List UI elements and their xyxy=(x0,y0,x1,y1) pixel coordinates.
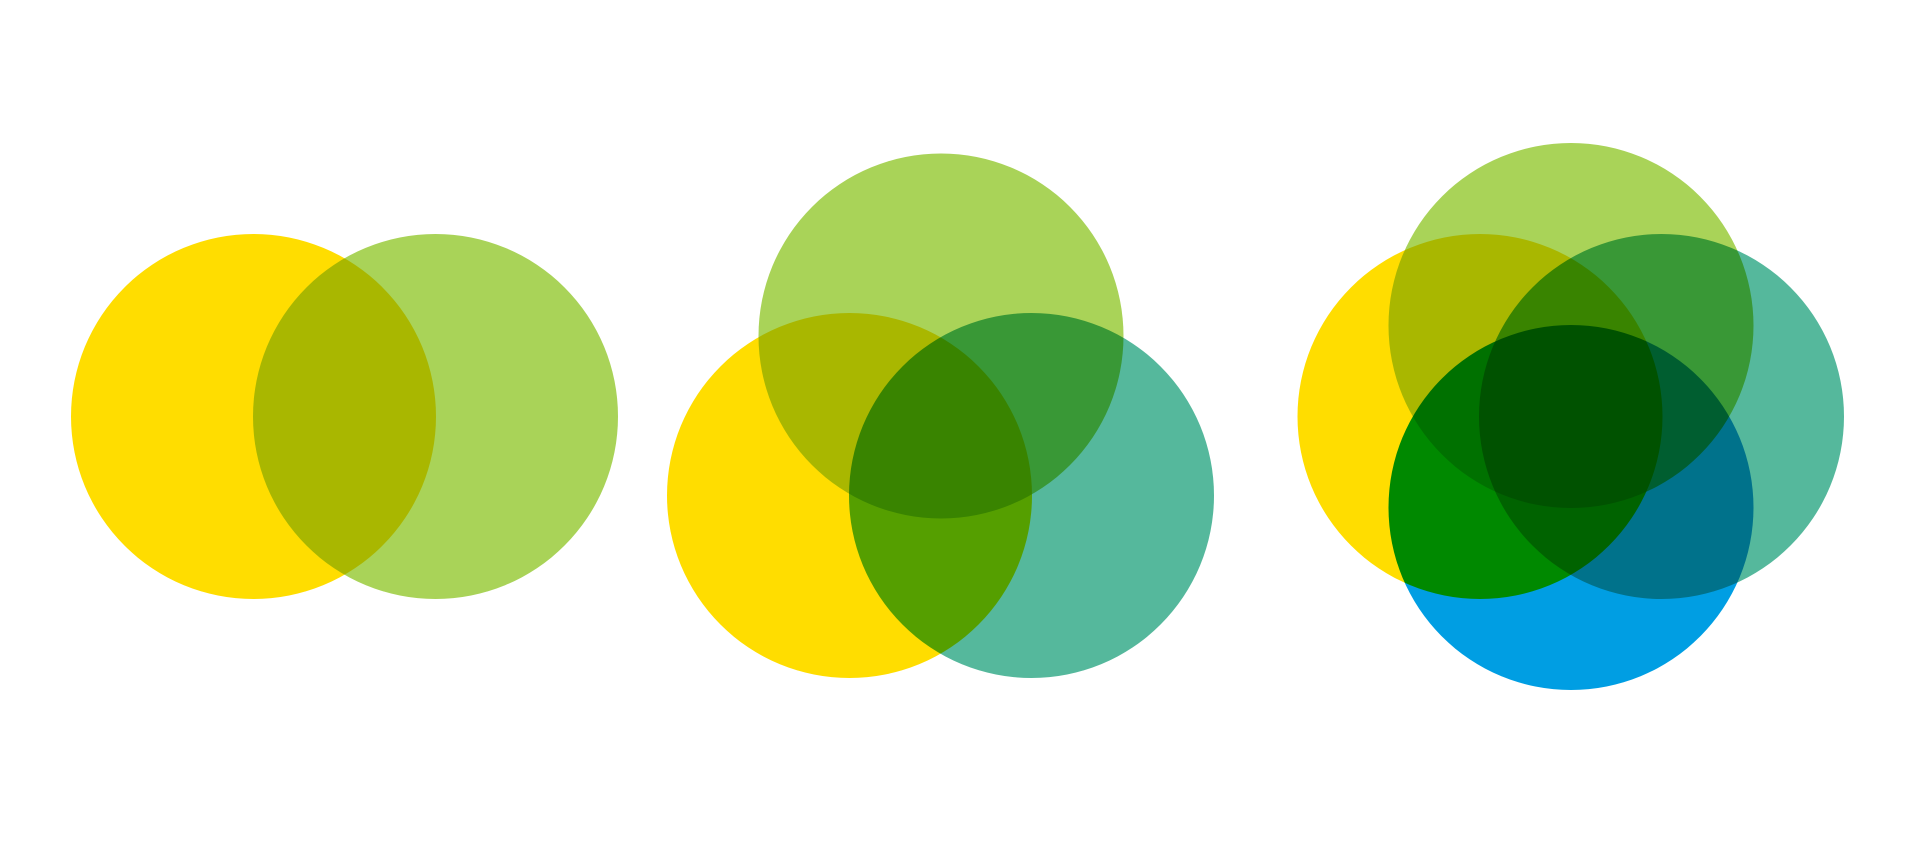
circle: light green top xyxy=(758,154,1124,518)
panel: two-circle Venn diagram xyxy=(71,234,618,599)
panel: four-circle Venn diagram xyxy=(1298,143,1844,690)
circle: teal lower right xyxy=(849,313,1214,678)
circle: teal right xyxy=(1479,234,1844,599)
panel: three-circle Venn diagram xyxy=(667,154,1214,678)
circle: yellow left xyxy=(1298,234,1662,599)
circle: blue bottom xyxy=(1388,325,1754,690)
circle: light green top xyxy=(1388,143,1754,508)
circle: yellow lower left xyxy=(667,313,1032,678)
circle: yellow xyxy=(71,234,436,599)
circle: light green xyxy=(253,234,618,599)
